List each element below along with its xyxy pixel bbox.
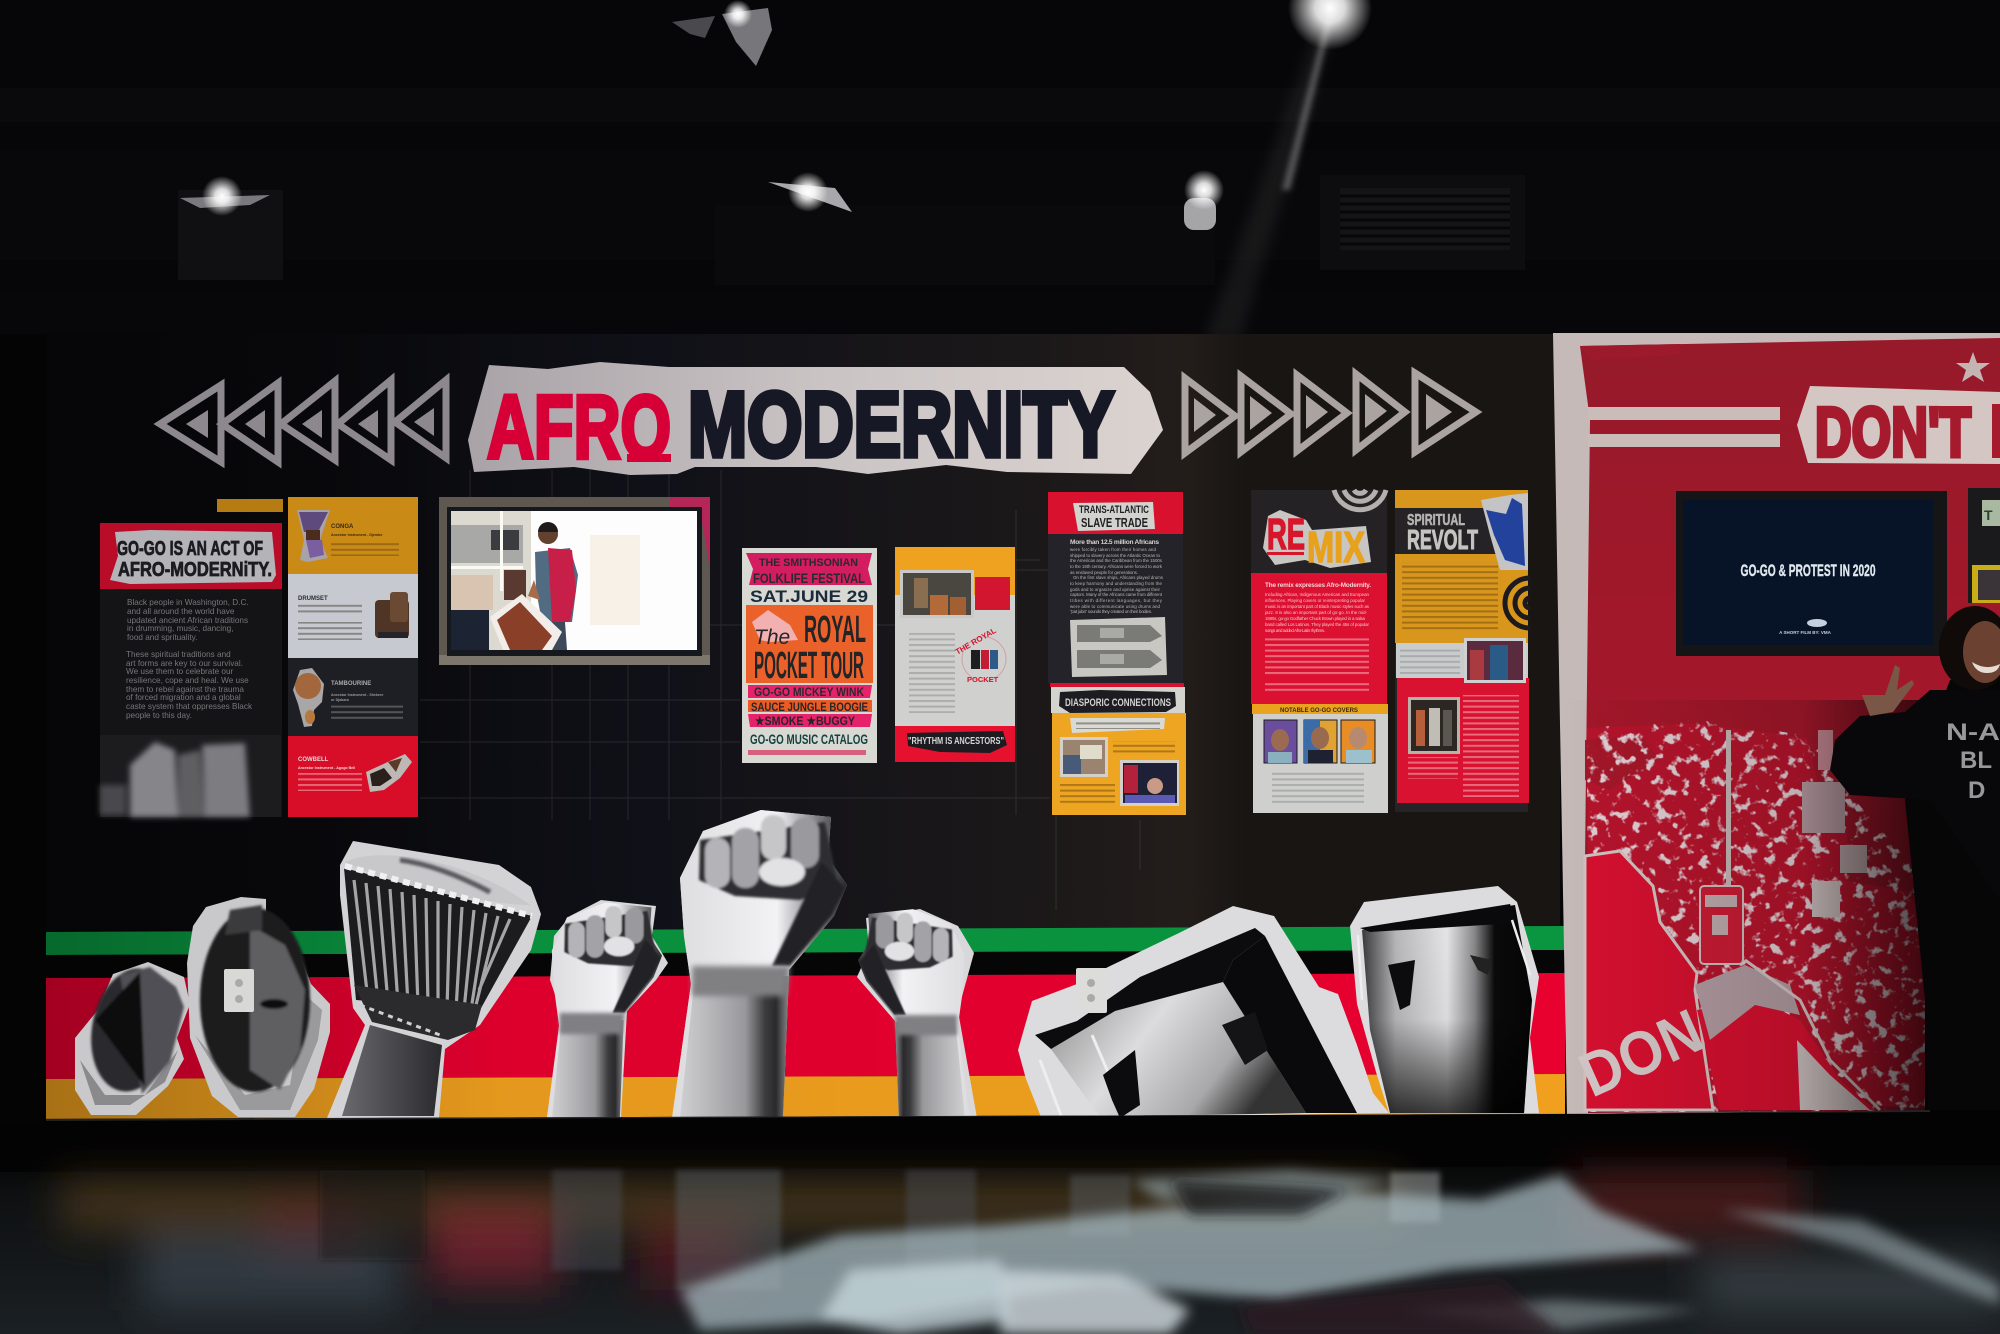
mural speckle	[1587, 723, 1957, 1110]
cut-out: tilted conga	[1018, 906, 1389, 1118]
panel: instruments	[288, 497, 418, 817]
poster: royal pocket tour: THE SMITHSONIAN	[759, 557, 858, 569]
shelves	[451, 511, 531, 650]
remix logo	[1263, 510, 1371, 572]
heading	[1407, 512, 1478, 555]
base band	[354, 985, 482, 1040]
spotlight centre	[768, 172, 852, 212]
heading: SLAVE TRADE	[1081, 515, 1148, 530]
drum head	[345, 855, 530, 905]
heading: TRANS-ATLANTIC	[1079, 504, 1149, 516]
concentric arcs	[1334, 490, 1386, 510]
panel: remix: NOTABLE GO-GO COVERS	[1280, 708, 1358, 714]
wall outlet	[224, 969, 254, 1012]
ceiling box centre	[715, 205, 1215, 285]
sleeve	[1830, 690, 2000, 900]
body: were able to communicate using drums and	[1070, 604, 1161, 609]
object reflections	[320, 1170, 1440, 1290]
cut-out: fist small right	[857, 909, 977, 1118]
body text: Black people in Washington, D.C.	[127, 598, 249, 607]
tambourine card: Ancestor Instrument - Shekere	[331, 693, 383, 697]
heading	[110, 530, 276, 584]
wall outlet	[1076, 968, 1107, 1013]
title plate	[468, 362, 1163, 475]
ceiling	[0, 0, 2000, 340]
remix body	[1264, 582, 1371, 633]
drummer	[528, 522, 578, 650]
body text: resilience, cope and heal. We use	[126, 676, 249, 685]
cut-out: fist large centre	[672, 810, 847, 1118]
cut-out: fist small left	[547, 900, 668, 1121]
cowbell card	[288, 736, 418, 817]
red protest wall	[1553, 333, 2000, 1120]
poster: royal pocket tour: FOLKLIFE FESTIVAL	[753, 570, 865, 586]
body text: These spiritual traditions and	[126, 650, 231, 659]
text: POCKET TOUR	[754, 645, 864, 687]
screen picture	[451, 511, 697, 650]
poster: royal pocket tour: ★SMOKE ★BUGGY	[755, 714, 855, 728]
stripes	[1588, 407, 1780, 447]
conga card: CONGA	[331, 524, 354, 530]
ceiling box left	[178, 190, 283, 280]
hoodie print: BL	[1960, 747, 1992, 774]
panel: the royal pocket	[895, 547, 1015, 762]
heading: SPIRITUAL	[1407, 512, 1465, 529]
poster: royal pocket tour: GO-GO MUSIC CATALOG	[750, 731, 868, 747]
cut-out: mask two	[187, 897, 330, 1117]
poster: royal pocket tour: The	[754, 626, 790, 649]
screen: go-go and protest	[1676, 491, 1947, 656]
logo	[954, 626, 1006, 684]
body: as enslaved people for generations.	[1070, 570, 1138, 575]
right arrows	[1185, 373, 1476, 453]
poster: royal pocket tour	[742, 548, 877, 763]
poster: royal pocket tour: GO-GO MICKEY WINK	[754, 685, 864, 699]
logo: THE ROYAL	[954, 626, 998, 657]
body text: food and sprituality.	[127, 633, 197, 642]
panel: spiritual revolt	[1395, 490, 1530, 812]
video screen: drummer	[439, 497, 710, 665]
logo: POCKET	[967, 675, 999, 684]
body text: We use them to celebrate our	[126, 667, 234, 676]
poster: royal pocket tour: SAT.JUNE 29	[750, 587, 868, 606]
arm	[342, 1025, 442, 1116]
body: tribes with different languages, but they	[1070, 598, 1163, 603]
drumset card	[288, 574, 418, 658]
body text: in drumming, music, dancing,	[127, 624, 233, 633]
tambourine card: or Djabara	[331, 698, 350, 702]
photo one	[1060, 737, 1108, 777]
remix body: 1980s, go-go Godfather Chuck Brown played in a salsa	[1265, 616, 1366, 621]
body: gods and to organize and uprise against their	[1070, 587, 1161, 592]
panel: trans-atlantic slave trade	[1048, 492, 1186, 815]
body text: them to rebel against the trauma	[126, 685, 244, 694]
remix body: The remix expresses Afro-Modernity.	[1265, 582, 1371, 589]
screen: go-go and protest: A SHORT FILM BY: VMA	[1779, 630, 1832, 635]
remix body: music is an important part of Black music styles such as	[1265, 604, 1370, 609]
cut-out: mask one	[75, 962, 190, 1115]
body text: updated ancient African traditions	[127, 616, 248, 625]
panel: go-go is an act of afro-modernity	[100, 499, 283, 817]
heading: GO-GO IS AN ACT OF	[117, 538, 263, 560]
small side panel: T	[1984, 507, 1993, 523]
body text: caste system that oppresses Black	[126, 702, 253, 711]
protester silhouette left	[1585, 851, 1713, 1110]
photo	[900, 570, 974, 618]
heading: AFRO-MODERNiTY.	[118, 559, 272, 581]
spotlight left	[180, 176, 270, 216]
screen: go-go and protest: GO-GO & PROTEST IN 2020	[1740, 561, 1876, 580]
drumset card: DRUMSET	[298, 596, 328, 602]
tambourine card: TAMBOURINE	[331, 681, 371, 687]
protest sign letters: DON	[1570, 997, 1713, 1111]
phone in mural	[1700, 886, 1743, 964]
slave ship diagram	[1070, 617, 1167, 677]
star	[1956, 352, 1990, 382]
body: the Americas and the Caribbean from the 1500s	[1070, 558, 1163, 563]
remix body: songs and added Afro-Latin rhythms.	[1265, 628, 1325, 633]
diasporic heading	[1059, 690, 1176, 713]
body: "pat juba" sounds they created on their bodies.	[1070, 609, 1152, 614]
hoodie print: N-A	[1946, 719, 2000, 746]
left wall shadow	[0, 334, 46, 1124]
body: were forcibly taken from their homes and	[1070, 547, 1157, 552]
panel: remix	[1251, 490, 1388, 813]
face	[1963, 621, 2000, 683]
title text: MODERNITY	[688, 374, 1114, 476]
body text: of forced migration and a global	[126, 693, 241, 702]
ceiling lights	[180, 0, 1372, 340]
photo musicians	[1408, 697, 1460, 754]
small side panel	[1968, 488, 2000, 603]
spotlight top centre	[672, 0, 772, 66]
diasporic heading: DIASPORIC CONNECTIONS	[1065, 697, 1171, 709]
photo two	[1120, 760, 1179, 806]
rhythm banner: "RHYTHM IS ANCESTORS"	[908, 736, 1004, 747]
remix logo: MIX	[1307, 523, 1365, 572]
cowbell card: Ancestor Instrument - Agogo Bell	[298, 766, 355, 770]
heading	[1073, 502, 1155, 531]
hoodie print: D	[1968, 777, 1985, 804]
diasporic quote	[1070, 718, 1165, 733]
body text: and all around the world have	[127, 607, 235, 616]
body text: people to this day.	[126, 711, 192, 720]
person posing	[1830, 606, 2000, 1170]
body text: art forms are key to our survival.	[126, 659, 243, 668]
portrait one	[1264, 720, 1297, 763]
tambourine card	[288, 658, 418, 736]
conga photo	[100, 735, 281, 817]
ceiling vent	[1320, 175, 1525, 270]
body: On the first slave ships, Africans played drums	[1073, 575, 1164, 580]
light beam	[1205, 12, 1338, 340]
body	[1070, 539, 1164, 614]
cut-out: upright conga	[1350, 886, 1539, 1113]
remix body: jazz. It is also an important part of go-go. In the mid-	[1264, 610, 1368, 615]
protester silhouette right	[1695, 960, 1880, 1110]
hair	[1939, 606, 2000, 690]
back wall	[0, 334, 1565, 1124]
body	[344, 868, 532, 1010]
left arrows	[160, 380, 446, 462]
heading: REVOLT	[1407, 524, 1478, 555]
remix body: band called Los Latinos. They played the 45s of popular	[1265, 622, 1370, 627]
peace hand	[1862, 665, 1914, 716]
poster: royal pocket tour: SAUCE JUNGLE BOOGIE	[751, 700, 868, 714]
title text	[487, 374, 1114, 478]
dancer cut-out	[1481, 493, 1528, 570]
portrait two	[1304, 720, 1337, 763]
pan-african floor stripes	[46, 926, 1565, 1119]
cut-out: djembe and arm	[327, 841, 541, 1118]
conga card	[288, 497, 418, 574]
body text	[126, 598, 253, 720]
baseboard	[0, 1110, 2000, 1172]
conga card: Ancestor Instrument - Djembe	[331, 533, 382, 537]
remix body: Including African, Indigenous American and European	[1265, 592, 1370, 597]
cover portraits	[1264, 720, 1375, 763]
hoodie print	[1946, 719, 2000, 804]
title text: AFRO	[487, 378, 671, 478]
body: to the 19th century. Africans were forced to work	[1070, 564, 1163, 569]
portrait three	[1341, 720, 1375, 763]
title banner	[160, 362, 1476, 478]
spotlight right	[1184, 170, 1224, 230]
photo graffiti	[1464, 638, 1526, 683]
body: captors. Many of the Africans came from different	[1070, 592, 1163, 597]
concentric circle	[1505, 578, 1530, 628]
reflective floor	[0, 1165, 2000, 1334]
spotlight main	[1288, 0, 1372, 50]
body: shipped to slavery across the Atlantic Ocean to	[1070, 553, 1161, 558]
body: to keep harmony and understanding from the	[1070, 581, 1163, 586]
cowbell card: COWBELL	[298, 757, 329, 763]
poster: royal pocket tour: ROYAL	[804, 609, 866, 651]
remix logo: RE	[1267, 510, 1305, 559]
remix body: influences. Playing covers or reinterpreting popular	[1265, 598, 1366, 603]
body: More than 12.5 million Africans	[1070, 539, 1159, 546]
drum	[490, 594, 562, 650]
rhythm banner	[907, 731, 1007, 753]
